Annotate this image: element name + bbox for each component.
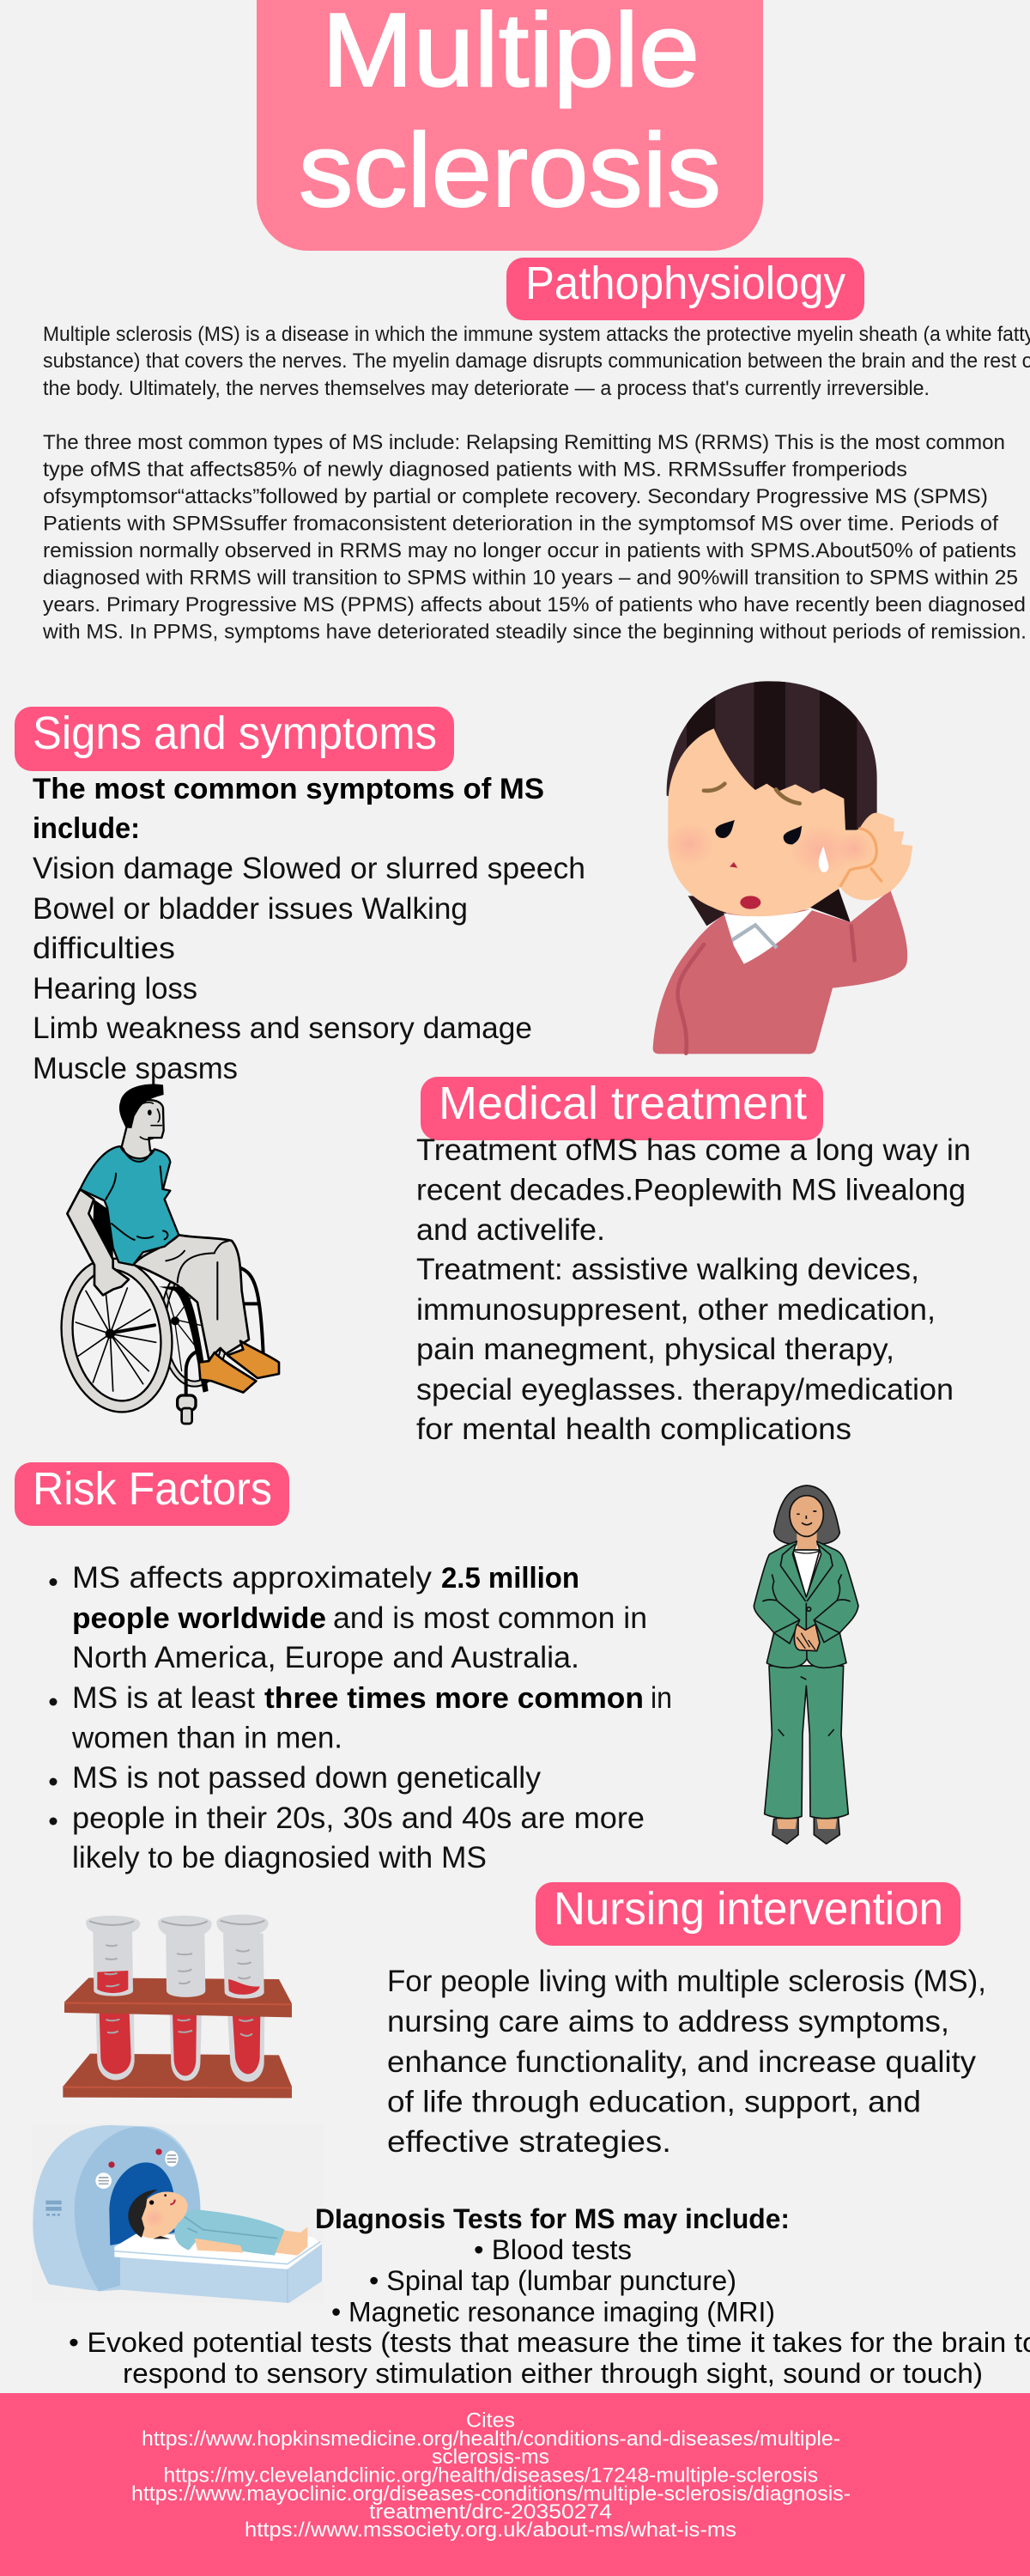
text block: medical treatment: and activelife. <box>416 1213 605 1247</box>
footer: citations: https://www.mayoclinic.org/diseases-conditions/multiple-sclerosis/diagnosis- <box>131 2482 851 2506</box>
text block: medical treatment: immunosuppresent, other medication, <box>416 1293 936 1327</box>
footer: citations: https://my.clevelandclinic.org/health/diseases/17248-multiple-sclerosis <box>163 2464 818 2487</box>
text block: nursing intervention: effective strategies. <box>387 2125 671 2159</box>
text block: symptoms list: The most common symptoms of MS <box>33 773 544 805</box>
text block: risk factors list: and is most common in <box>333 1601 647 1635</box>
icon: man in a wheelchair <box>58 1084 279 1424</box>
text block: risk factors list: MS is at least <box>72 1681 255 1715</box>
icon: test tube rack with blood samples <box>63 1915 292 2098</box>
text block: nursing intervention <box>387 1965 986 2159</box>
text block: nursing intervention: nursing care aims to address symptoms, <box>387 2005 949 2038</box>
text block: medical treatment: Treatment: assistive walking devices, <box>416 1253 919 1286</box>
icon: patient in an MRI scanner <box>32 2123 324 2303</box>
title <box>257 0 763 251</box>
text block: symptoms list: difficulties <box>33 932 175 965</box>
text block: risk factors list: 2.5 million <box>441 1562 579 1595</box>
footer: citations: Cites <box>466 2409 515 2432</box>
text block: medical treatment: pain manegment, physical therapy, <box>416 1333 894 1366</box>
text block: types of MS: type ofMS that affects85% of newly diagnosed patients with MS. RRMSsuffer fromperiods <box>43 459 907 481</box>
text block: risk factors list: people worldwide <box>72 1602 326 1635</box>
text block: risk factors list <box>50 1561 672 1874</box>
text block: nursing intervention: For people living with multiple sclerosis (MS), <box>387 1965 986 1998</box>
footer: citations: sclerosis-ms <box>432 2445 549 2469</box>
text block: diagnosis tests: • Magnetic resonance imaging (MRI) <box>331 2296 775 2327</box>
text block: symptoms list: include: <box>33 812 140 845</box>
text block: symptoms list <box>33 773 585 1085</box>
text block: risk factors list: women than in men. <box>71 1721 342 1755</box>
text block: symptoms list: Hearing loss <box>33 972 197 1005</box>
heading: Medical treatment: Medical treatment <box>439 1078 807 1129</box>
text block: types of MS: ofsymptomsor“attacks”followed by partial or complete recovery. Secondary Progressive MS (SPMS) <box>43 485 988 508</box>
text block: diagnosis tests: • Spinal tap (lumbar puncture) <box>369 2265 736 2296</box>
heading: Pathophysiology: Pathophysiology <box>525 258 845 309</box>
text block: pathophysiology intro: the body. Ultimately, the nerves themselves may deteriorate — a process that's currently irreversible. <box>43 377 930 400</box>
text block: types of MS: remission normally observed in RRMS may no longer occur in patients with SPMS.About50% of patients <box>43 539 1016 562</box>
title: sclerosis <box>299 112 721 228</box>
text block: nursing intervention: of life through education, support, and <box>387 2085 921 2119</box>
text block: types of MS: Patients with SPMSsuffer fromaconsistent deterioration in the symptomsof MS over time. Periods of <box>43 512 998 536</box>
text block: pathophysiology intro <box>43 323 1030 400</box>
text block: medical treatment: recent decades.Peoplewith MS livealong <box>416 1173 966 1207</box>
text block: risk factors list: in <box>651 1681 672 1715</box>
text block: risk factors list: North America, Europe and Australia. <box>72 1641 579 1674</box>
text block: risk factors list: MS affects approximately <box>72 1561 433 1595</box>
text block: types of MS <box>42 431 1027 644</box>
footer: citations: https://www.mssociety.org.uk/about-ms/what-is-ms <box>245 2518 736 2542</box>
text block: symptoms list: Muscle spasms <box>33 1052 238 1085</box>
text block: medical treatment: Treatment ofMS has come a long way in <box>416 1133 971 1167</box>
text block: diagnosis tests: respond to sensory stimulation either through sight, sound or touch) <box>123 2358 983 2389</box>
icon: worried woman cupping her ear <box>653 678 912 1054</box>
footer: citations: treatment/drc-20350274 <box>369 2500 612 2524</box>
text block: symptoms list: Vision damage Slowed or slurred speech <box>33 852 585 885</box>
footer: citations: https://www.hopkinsmedicine.org/health/conditions-and-diseases/multiple- <box>142 2427 840 2451</box>
text block: types of MS: years. Primary Progressive MS (PPMS) affects about 15% of patients who have recently been diagnosed <box>43 593 1026 617</box>
text block: types of MS: diagnosed with RRMS will transition to SPMS within 10 years – and 90%will transition to SPMS within 25 <box>43 567 1018 589</box>
text block: diagnosis tests: • Blood tests <box>474 2234 632 2265</box>
text block: medical treatment: special eyeglasses. therapy/medication <box>416 1373 954 1406</box>
text block: risk factors list: three times more common <box>264 1682 644 1715</box>
icon: woman in a green suit <box>754 1485 858 1844</box>
text block: symptoms list: Bowel or bladder issues Walking <box>33 892 468 926</box>
text block: types of MS: The three most common types of MS include: Relapsing Remitting MS (RRMS) This is the most common <box>43 431 1005 454</box>
text block: symptoms list: Limb weakness and sensory damage <box>33 1012 532 1045</box>
text block: diagnosis tests: DIagnosis Tests for MS may include: <box>315 2203 790 2234</box>
heading: Signs and symptoms: Signs and symptoms <box>33 708 437 759</box>
heading: Nursing intervention: Nursing intervention <box>554 1883 943 1935</box>
text block: risk factors list: people in their 20s, 30s and 40s are more <box>72 1801 645 1835</box>
text block: diagnosis tests: • Evoked potential tests (tests that measure the time it takes for the brain to <box>69 2327 1030 2358</box>
text block: types of MS: with MS. In PPMS, symptoms have deteriorated steadily since the beginning without periods of remission. <box>42 620 1027 644</box>
text block: risk factors list: MS is not passed down genetically <box>72 1761 542 1795</box>
text block: risk factors list: likely to be diagnosied with MS <box>72 1841 487 1874</box>
text block: diagnosis tests <box>69 2203 1030 2389</box>
text block: nursing intervention: enhance functionality, and increase quality <box>387 2045 977 2079</box>
heading: Risk Factors: Risk Factors <box>33 1463 272 1515</box>
footer: citations <box>0 2393 1030 2576</box>
text block: medical treatment <box>416 1133 971 1446</box>
text block: medical treatment: for mental health complications <box>416 1413 851 1446</box>
